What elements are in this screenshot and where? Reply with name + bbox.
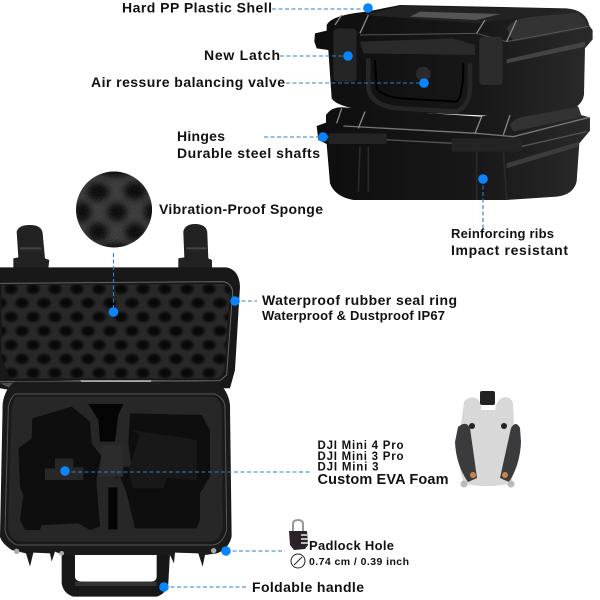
labels: Air ressure balancing valve — [91, 74, 285, 90]
marker dots — [60, 3, 488, 592]
carrying handle — [360, 38, 475, 112]
labels: DJI Mini 3 Pro — [318, 451, 404, 463]
latch right — [479, 37, 503, 85]
labels: DJI Mini 4 Pro — [318, 440, 404, 452]
labels: New Latch — [204, 47, 280, 63]
sponge close-up — [76, 172, 152, 248]
hinge blocks — [328, 133, 522, 152]
lid shell — [0, 267, 240, 390]
labels: Vibration-Proof Sponge — [159, 201, 323, 217]
labels — [91, 0, 568, 595]
labels: Reinforcing ribs — [451, 226, 554, 241]
lid latches — [13, 224, 212, 268]
labels: Waterproof & Dustproof IP67 — [262, 308, 445, 323]
lid egg-crate foam — [2, 284, 230, 378]
diameter icon — [291, 554, 305, 568]
corner bolts — [14, 548, 216, 556]
latch left — [333, 28, 357, 82]
open base with foam — [0, 382, 232, 597]
labels: Durable steel shafts — [177, 145, 320, 161]
pressure valve — [416, 67, 431, 81]
bottom stacked case — [317, 103, 590, 200]
fuselage — [459, 397, 516, 486]
left folded arm — [455, 424, 477, 482]
drone cutouts — [18, 404, 210, 530]
labels: Impact resistant — [451, 242, 568, 258]
carry handle — [62, 553, 170, 597]
open lid with latches — [0, 224, 240, 390]
labels: Foldable handle — [252, 579, 364, 595]
leader lines — [65, 9, 483, 587]
labels: Custom EVA Foam — [318, 472, 448, 488]
right folded arm — [500, 424, 521, 482]
labels: Padlock Hole — [309, 538, 394, 553]
labels: 0.74 cm / 0.39 inch — [309, 556, 409, 568]
padlock icon — [289, 520, 308, 550]
drone — [455, 391, 521, 488]
base shell — [0, 382, 232, 567]
labels: Hinges — [177, 128, 225, 144]
labels: DJI Mini 3 — [318, 462, 378, 474]
top stacked case — [314, 5, 593, 117]
camera — [480, 391, 495, 405]
labels: Waterproof rubber seal ring — [262, 292, 457, 308]
foam block — [8, 397, 223, 542]
